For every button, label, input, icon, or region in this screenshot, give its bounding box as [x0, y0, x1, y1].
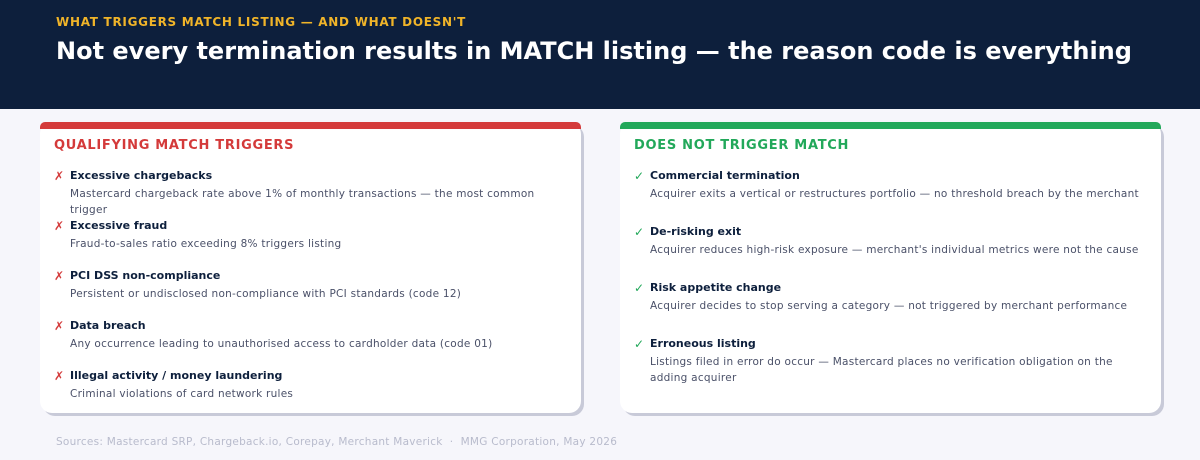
panel: does not trigger: [620, 122, 1164, 416]
item: excessive fraud: Excessive fraud: [70, 219, 167, 232]
item: PCI DSS: [54, 269, 461, 300]
item: erroneous listing: Listings filed in error do occur — Mastercard places no verification obligation on the: [650, 356, 1113, 368]
item: risk appetite change: ✓: [634, 281, 644, 295]
panel: qualifying triggers: [40, 122, 584, 416]
item: PCI DSS: ✗: [54, 269, 64, 283]
item: illegal activity: Criminal violations of card network rules: [70, 388, 293, 400]
item: illegal activity: [54, 369, 293, 400]
item: data breach: ✗: [54, 319, 64, 333]
header band: [0, 0, 1200, 109]
item: data breach: [54, 319, 492, 350]
item: excessive chargebacks: trigger: [70, 204, 108, 216]
item: erroneous listing: Erroneous listing: [650, 337, 756, 350]
item: data breach: Data breach: [70, 319, 146, 332]
item: erroneous listing: adding acquirer: [650, 372, 737, 384]
item: excessive fraud: [54, 219, 341, 250]
item: risk appetite change: [634, 281, 1127, 312]
item: erroneous listing: [634, 337, 1113, 384]
title: Not every termination results in MATCH listing — the reason code is everything: [56, 37, 1132, 65]
panel heading: QUALIFYING MATCH TRIGGERS: [54, 138, 294, 153]
item: de-risking exit: ✓: [634, 225, 644, 239]
item: excessive chargebacks: [54, 169, 534, 216]
item: excessive fraud: Fraud-to-sales ratio exceeding 8% triggers listing: [70, 238, 341, 250]
item: excessive chargebacks: Mastercard chargeback rate above 1% of monthly transactions — the most common: [70, 188, 534, 200]
eyebrow: WHAT TRIGGERS MATCH LISTING — AND WHAT DOESN'T: [56, 15, 466, 29]
item: excessive chargebacks: Excessive chargebacks: [70, 169, 213, 182]
item: commercial termination: [634, 169, 1139, 200]
item: de-risking exit: Acquirer reduces high-risk exposure — merchant's individual metrics were not the cause: [650, 244, 1139, 256]
item: excessive chargebacks: ✗: [54, 169, 64, 183]
item: PCI DSS: PCI DSS non-compliance: [70, 269, 220, 282]
item: commercial termination: ✓: [634, 169, 644, 183]
item: PCI DSS: Persistent or undisclosed non-compliance with PCI standards (code 12): [70, 288, 461, 300]
item: erroneous listing: ✓: [634, 337, 644, 351]
item: risk appetite change: Acquirer decides to stop serving a category — not triggered by merchant performance: [650, 300, 1127, 312]
item: illegal activity: ✗: [54, 369, 64, 383]
item: illegal activity: Illegal activity / money laundering: [70, 369, 282, 382]
item: risk appetite change: Risk appetite change: [650, 281, 781, 294]
item: de-risking exit: De-risking exit: [650, 225, 741, 238]
item: commercial termination: Acquirer exits a vertical or restructures portfolio — no threshold breach by the merchant: [650, 188, 1139, 200]
panel accent bar red: [40, 122, 581, 129]
panel accent bar green: [620, 122, 1161, 129]
item: excessive fraud: ✗: [54, 219, 64, 233]
item: de-risking exit: [634, 225, 1139, 256]
item: commercial termination: Commercial termination: [650, 169, 800, 182]
item: data breach: Any occurrence leading to unauthorised access to cardholder data (code 01): [70, 338, 492, 350]
footer sources: Sources: Mastercard SRP, Chargeback.io, Corepay, Merchant Maverick · MMG Corporation, May 2026: [56, 436, 617, 448]
panel heading: DOES NOT TRIGGER MATCH: [634, 138, 849, 153]
